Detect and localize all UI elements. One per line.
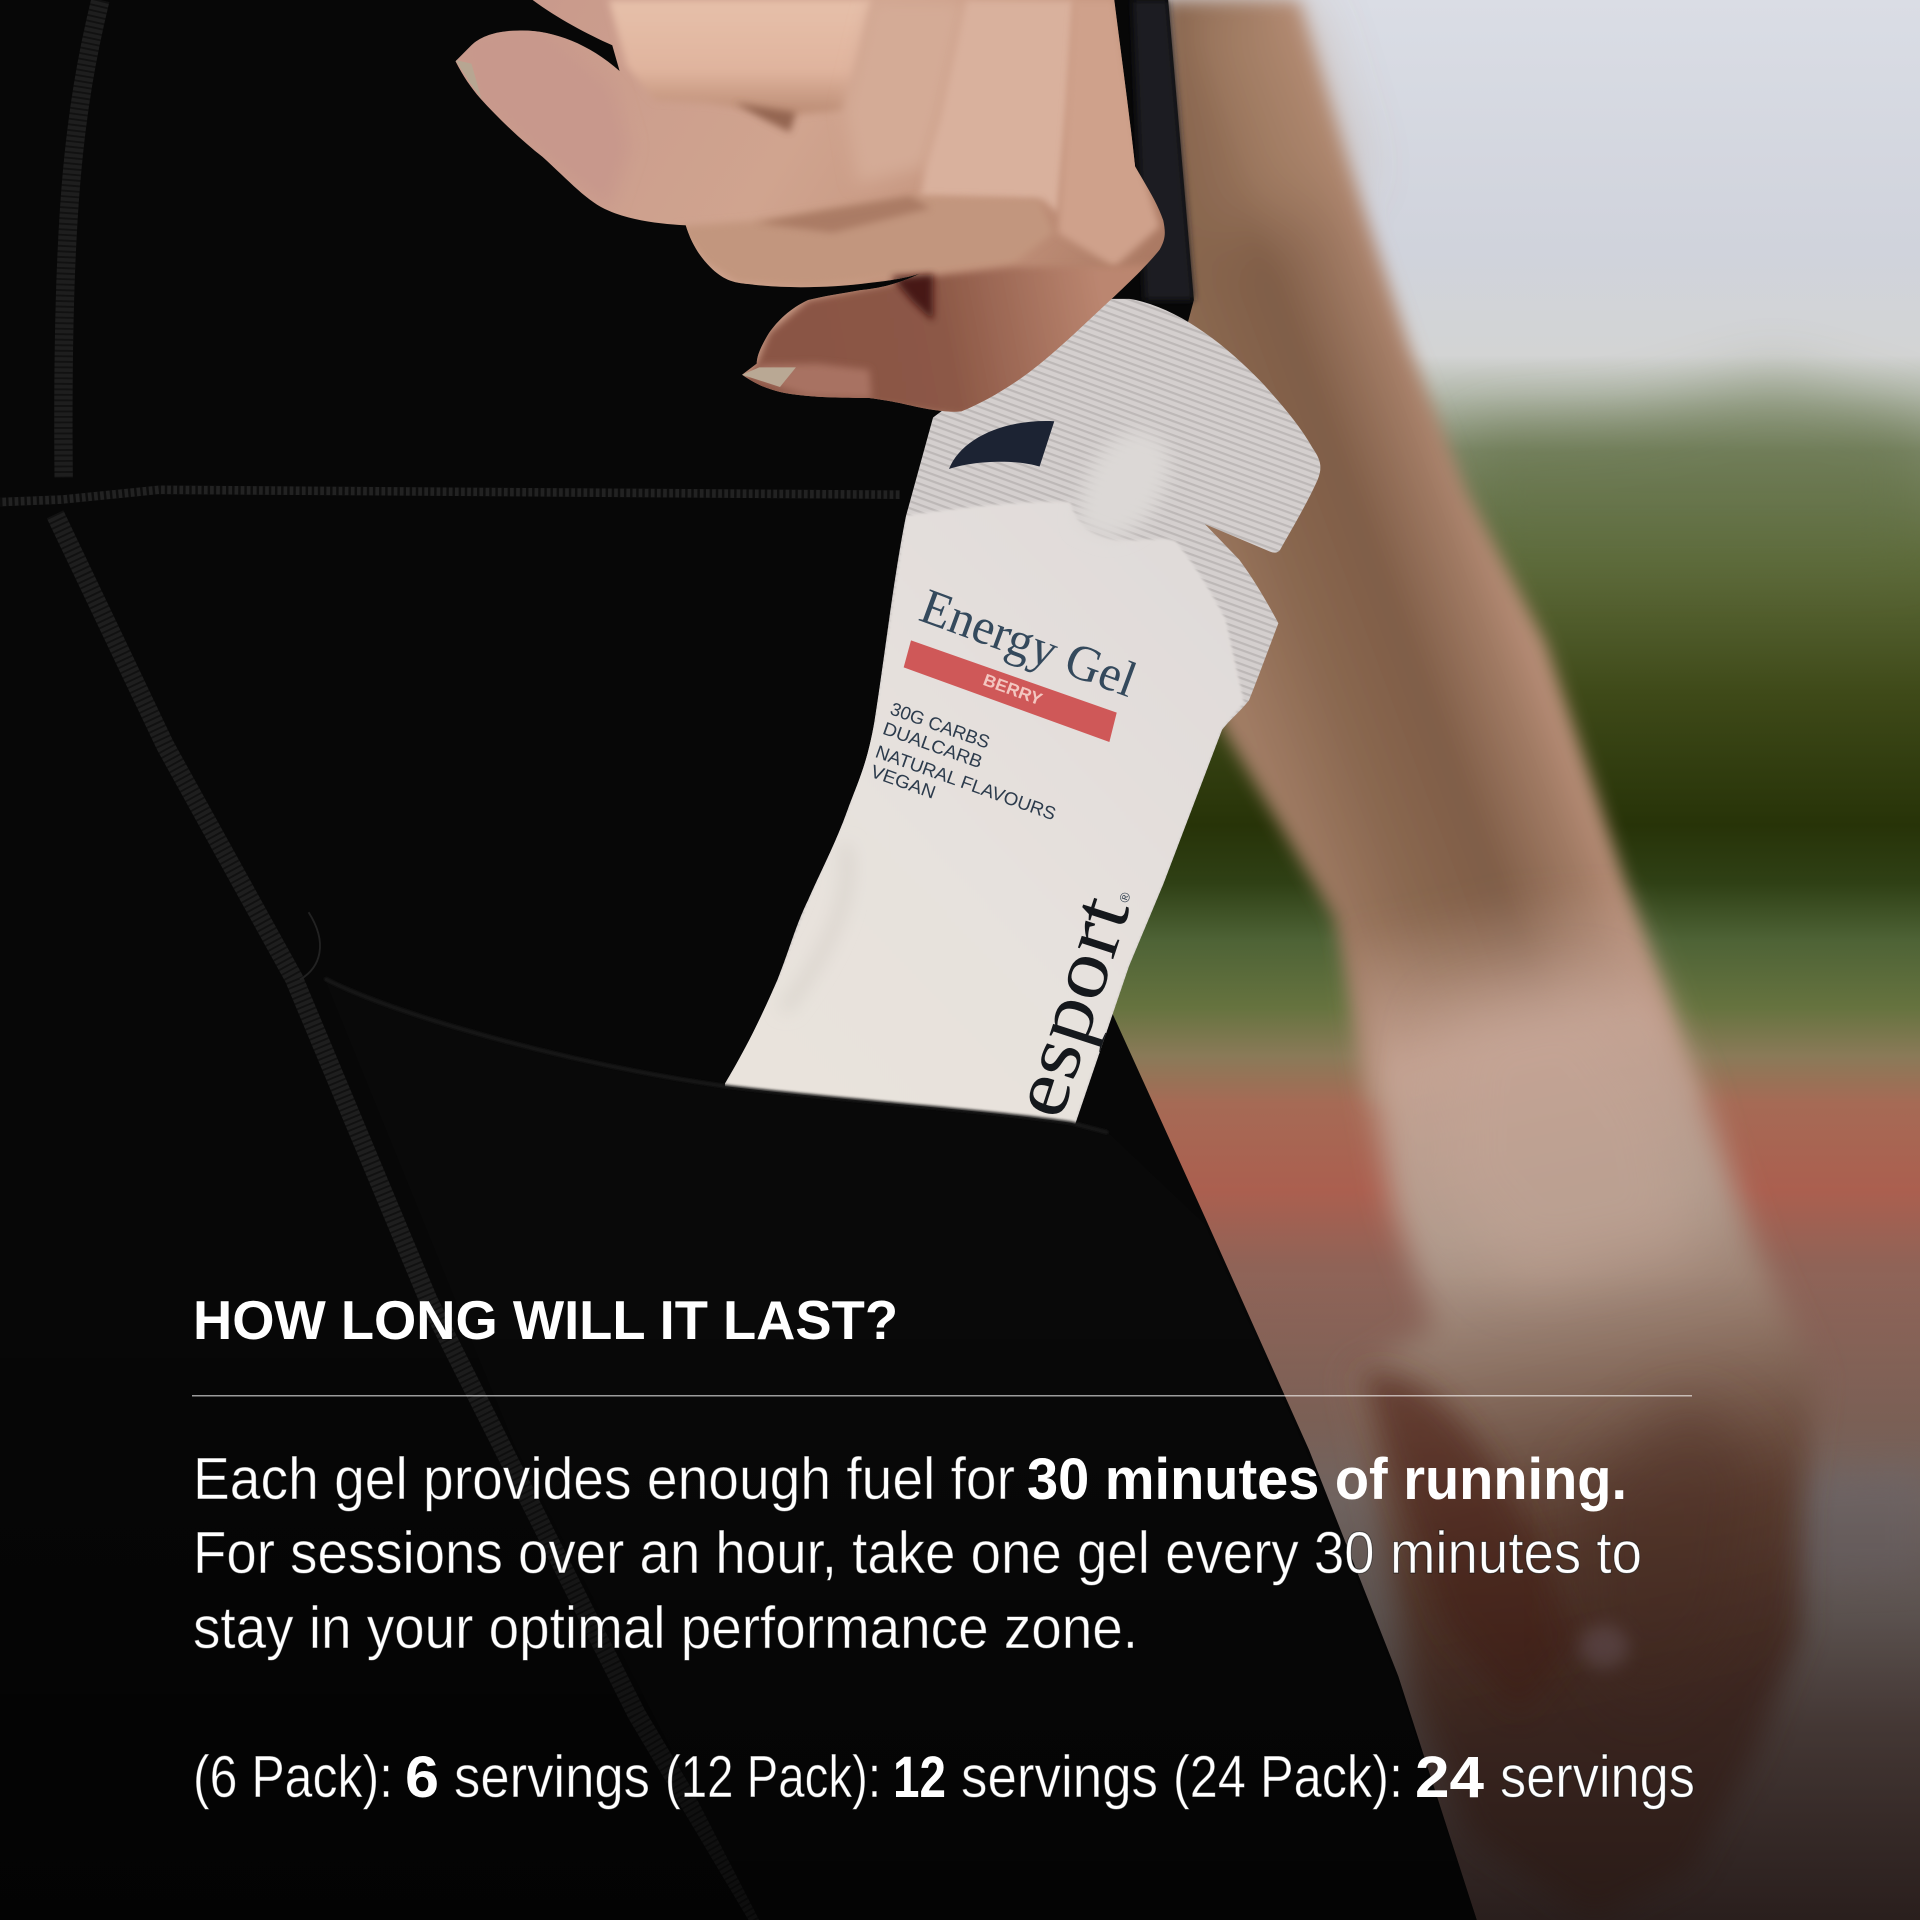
ring finger [921, 0, 1074, 213]
pack sizes and servings: 24 [1415, 1745, 1484, 1810]
gel feature list: VEGAN [868, 760, 939, 803]
index finger shading [466, 30, 609, 211]
pack sizes and servings: (24 Pack): [1173, 1744, 1403, 1810]
body paragraph: 30 minutes of running. [1027, 1447, 1627, 1512]
gel name: Energy Gel [913, 577, 1144, 708]
dark gradient overlay behind the copy [0, 1273, 1920, 1920]
lower fold finger [677, 196, 1053, 287]
thumb [735, 263, 1163, 416]
pack sizes and servings: servings [1500, 1744, 1695, 1810]
pack sizes and servings [193, 1744, 1695, 1810]
product: energy gel sachet [725, 298, 1320, 1124]
gel flavour bar [904, 640, 1117, 742]
gel feature list: 30G CARBS [888, 698, 993, 753]
gel feature list [874, 703, 1056, 820]
pack sizes and servings: 12 [893, 1745, 946, 1810]
pack sizes and servings: servings [961, 1744, 1158, 1810]
gel fold shadows [784, 845, 848, 1010]
gel flavour label: BERRY [981, 669, 1046, 709]
gel registered mark: ® [1116, 890, 1134, 905]
leggings seams: stitched panel lines [0, 0, 1359, 1920]
gel brand wordmark: esport [993, 885, 1147, 1127]
thumb crease [891, 274, 933, 321]
gel blister bump [1078, 431, 1170, 539]
leggings pocket: fabric covering the sachet base [324, 978, 1477, 1920]
pack sizes and servings: (12 Pack): [665, 1744, 881, 1810]
gel feature list: DUALCARB [880, 717, 985, 772]
knuckle crease shadow [735, 103, 796, 132]
body paragraph [193, 1446, 1642, 1661]
heading: HOW LONG WILL IT LAST? [193, 1289, 898, 1351]
leggings: black fabric silhouette [0, 0, 1477, 1920]
index finger nail [456, 60, 481, 98]
folded knuckle [609, 0, 872, 115]
thumb tip [749, 364, 872, 399]
little finger [1058, 0, 1160, 267]
gel ribbed seal tab [725, 298, 1320, 1124]
hand: blurred relaxed hand at the lower right [1340, 894, 1816, 1920]
gel smooth body [725, 502, 1244, 1139]
pack sizes and servings: servings [454, 1744, 650, 1810]
thumb nail [742, 367, 796, 387]
arm: blurred forearm behind the gel [1163, 0, 1696, 1102]
gel logo mark [949, 421, 1054, 469]
pack sizes and servings: 6 [405, 1745, 439, 1810]
palm skin between knuckle and ring finger [850, 4, 958, 179]
divider rule [192, 1395, 1692, 1396]
pack sizes and servings: (6 Pack): [193, 1744, 393, 1810]
gel feature list: NATURAL FLAVOURS [873, 741, 1059, 824]
hand: fingers holding the gel [441, 0, 1188, 422]
body paragraph: Each gel provides enough fuel for [193, 1446, 1015, 1512]
body paragraph: stay in your optimal performance zone. [193, 1595, 1138, 1661]
body paragraph: For sessions over an hour, take one gel every 30 minutes to [193, 1520, 1642, 1586]
